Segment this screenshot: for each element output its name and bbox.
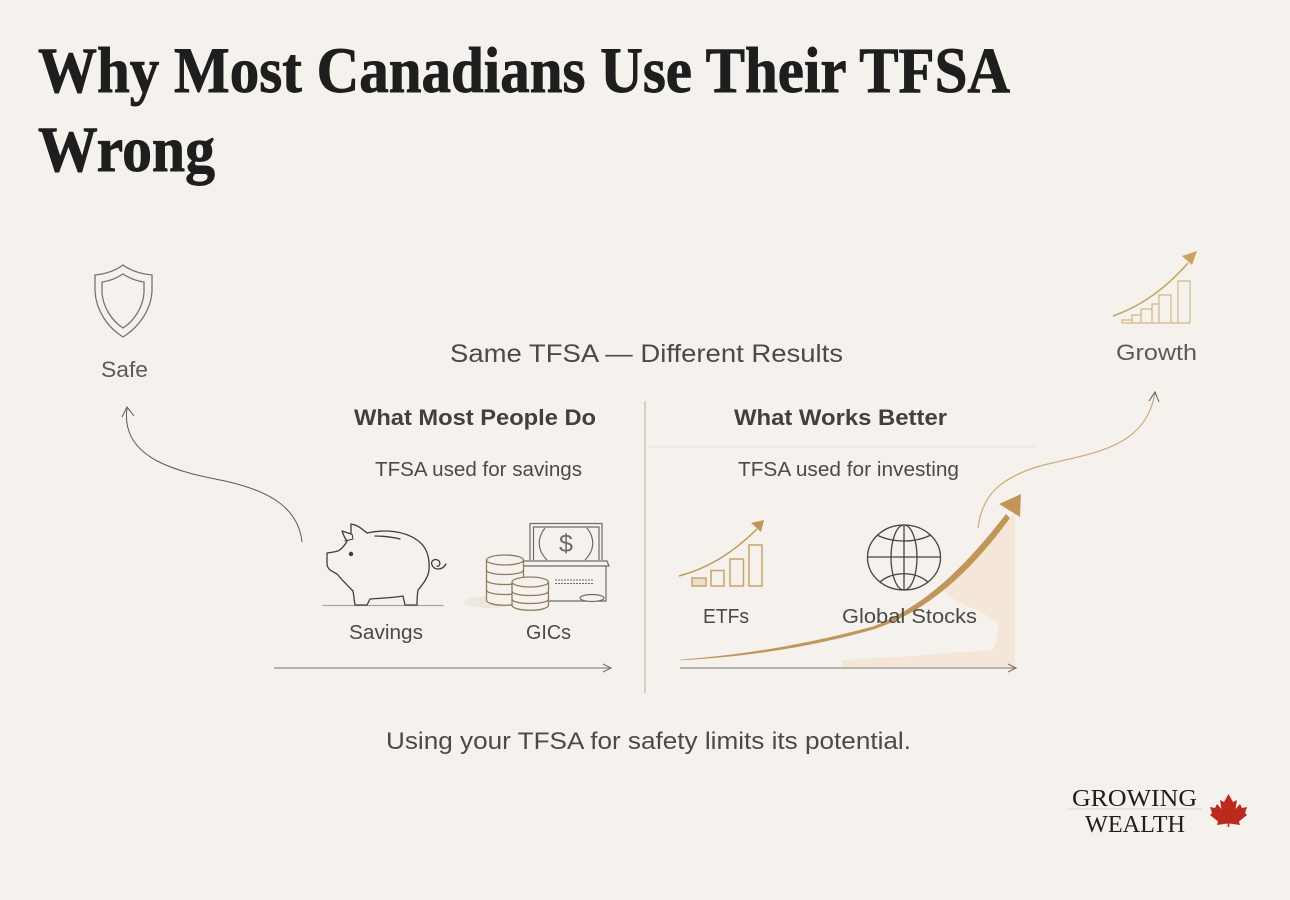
dollar sign: $ bbox=[559, 530, 573, 558]
divider bbox=[645, 401, 1035, 693]
title bbox=[38, 35, 1010, 186]
icon: shield bbox=[95, 265, 152, 337]
arrow: main growth curve bbox=[680, 494, 1021, 660]
heading: what most people do: What Most People Do bbox=[354, 405, 596, 430]
subtitle: Same TFSA — Different Results bbox=[450, 340, 843, 368]
text: tfsa used for savings: TFSA used for savings bbox=[375, 459, 582, 481]
arrow: left axis bbox=[274, 664, 611, 672]
label: etfs: ETFs bbox=[703, 606, 749, 628]
arrow: safe curve bbox=[122, 407, 302, 542]
heading: what works better: What Works Better bbox=[734, 405, 947, 430]
label: safe: Safe bbox=[101, 357, 148, 382]
area: growth shade bbox=[842, 513, 1015, 667]
logo: WEALTH bbox=[1085, 812, 1185, 838]
label: gics: GICs bbox=[526, 622, 571, 644]
label: savings: Savings bbox=[349, 622, 423, 644]
logo: GROWING bbox=[1072, 786, 1197, 812]
caption: Using your TFSA for safety limits its potential. bbox=[386, 728, 911, 755]
label: growth: Growth bbox=[1116, 340, 1197, 365]
icon: piggy bank bbox=[323, 524, 446, 606]
logo bbox=[1067, 786, 1247, 838]
title: Wrong bbox=[38, 114, 215, 186]
arrow: right axis bbox=[680, 664, 1016, 672]
icon: gics bill and coins bbox=[464, 524, 609, 610]
icon: maple leaf bbox=[1210, 794, 1247, 827]
arrow: growth curve bbox=[978, 392, 1159, 528]
title: Why Most Canadians Use Their TFSA bbox=[38, 35, 1010, 107]
icon: globe bbox=[868, 525, 940, 590]
label: global stocks: Global Stocks bbox=[842, 606, 977, 628]
icon: growth chart bbox=[1113, 251, 1197, 323]
text: tfsa used for investing: TFSA used for investing bbox=[738, 459, 959, 481]
icon: etfs chart bbox=[679, 520, 764, 586]
